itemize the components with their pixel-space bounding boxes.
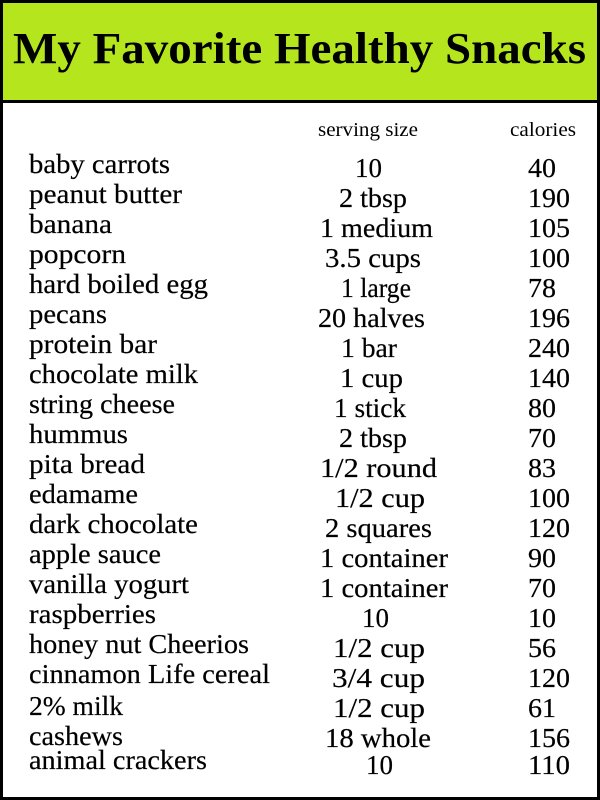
row: cashews: cashews <box>29 721 123 751</box>
row: animal crackers: 110 <box>528 750 570 780</box>
row: animal crackers: 10 <box>366 750 393 780</box>
row: banana: 105 <box>528 213 570 243</box>
row: hummus: hummus <box>29 419 128 449</box>
row: chocolate milk: chocolate milk <box>29 359 199 389</box>
row: peanut butter: 2 tbsp <box>339 183 407 213</box>
row: hard boiled egg: 78 <box>528 273 556 303</box>
row: apple sauce <box>29 539 556 573</box>
row: string cheese: string cheese <box>29 389 175 419</box>
row: pita bread: 1/2 round <box>320 453 438 483</box>
row: popcorn: popcorn <box>29 239 127 269</box>
row: honey nut Cheerios <box>29 629 556 663</box>
row: vanilla yogurt <box>29 569 556 603</box>
row: pecans: 20 halves <box>318 303 425 333</box>
row: honey nut Cheerios: 1/2 cup <box>333 633 425 663</box>
row: hard boiled egg: 1 large <box>341 273 411 303</box>
row: banana: banana <box>29 209 112 239</box>
row: pecans: 196 <box>528 303 570 333</box>
row: 2% milk: 1/2 cup <box>333 693 425 723</box>
row: peanut butter: peanut butter <box>29 179 182 209</box>
column headings: calories <box>510 119 576 141</box>
row: raspberries: 10 <box>362 603 389 633</box>
row: edamame: 100 <box>528 483 570 513</box>
row: chocolate milk: 140 <box>528 363 570 393</box>
row: vanilla yogurt: 70 <box>528 573 556 603</box>
row: vanilla yogurt: 1 container <box>320 573 448 603</box>
row: banana: 1 medium <box>320 213 433 243</box>
row: protein bar: 1 bar <box>341 333 397 363</box>
row: cinnamon Life cereal: 120 <box>528 663 570 693</box>
row: popcorn: 3.5 cups <box>325 243 421 273</box>
row: string cheese: 1 stick <box>334 393 406 423</box>
row: raspberries: raspberries <box>29 599 156 629</box>
row: pecans <box>29 299 570 333</box>
snack rows <box>29 149 570 780</box>
row: animal crackers <box>29 745 570 780</box>
column headings: serving size <box>318 119 418 141</box>
column headings <box>318 119 576 141</box>
row: baby carrots: 10 <box>355 153 382 183</box>
row: apple sauce: 1 container <box>320 543 448 573</box>
row: hard boiled egg: hard boiled egg <box>29 269 208 299</box>
row: edamame: edamame <box>29 479 138 509</box>
title: My Favorite Healthy Snacks <box>13 24 586 73</box>
row: popcorn: 100 <box>528 243 570 273</box>
row: edamame <box>29 479 570 513</box>
row: apple sauce: 90 <box>528 543 556 573</box>
row: chocolate milk <box>29 359 570 393</box>
row: cashews: 156 <box>528 723 570 753</box>
panel: title banner <box>3 3 597 100</box>
row: cinnamon Life cereal: cinnamon Life cereal <box>29 659 270 689</box>
row: apple sauce: apple sauce <box>29 539 161 569</box>
row: string cheese: 80 <box>528 393 556 423</box>
row: 2% milk: 2% milk <box>29 691 124 721</box>
row: animal crackers: animal crackers <box>29 745 207 775</box>
row: cinnamon Life cereal <box>29 659 570 693</box>
row: raspberries: 10 <box>528 603 556 633</box>
row: raspberries <box>29 599 556 633</box>
row: honey nut Cheerios: honey nut Cheerios <box>29 629 249 659</box>
row: peanut butter: 190 <box>528 183 570 213</box>
row: hummus: 2 tbsp <box>339 423 407 453</box>
row: dark chocolate <box>29 509 570 543</box>
row: 2% milk <box>29 691 556 723</box>
row: protein bar: 240 <box>528 333 570 363</box>
row: protein bar: protein bar <box>29 329 157 359</box>
row: hummus <box>29 419 556 453</box>
row: pecans: pecans <box>29 299 107 329</box>
row: dark chocolate: 2 squares <box>325 513 432 543</box>
row: cashews: 18 whole <box>325 723 431 753</box>
row: string cheese <box>29 389 556 423</box>
row: chocolate milk: 1 cup <box>340 363 403 393</box>
row: pita bread <box>29 449 556 483</box>
row: popcorn <box>29 239 570 273</box>
row: hard boiled egg <box>29 269 556 303</box>
row: protein bar <box>29 329 570 363</box>
row: peanut butter <box>29 179 570 213</box>
row: hummus: 70 <box>528 423 556 453</box>
row: baby carrots <box>29 149 556 183</box>
row: banana <box>29 209 570 243</box>
row: dark chocolate: 120 <box>528 513 570 543</box>
row: dark chocolate: dark chocolate <box>29 509 198 539</box>
row: pita bread: 83 <box>528 453 556 483</box>
row: baby carrots: 40 <box>528 153 556 183</box>
row: pita bread: pita bread <box>29 449 146 479</box>
row: 2% milk: 61 <box>528 693 556 723</box>
row: cinnamon Life cereal: 3/4 cup <box>332 663 425 693</box>
row: baby carrots: baby carrots <box>29 149 170 179</box>
row: vanilla yogurt: vanilla yogurt <box>29 569 190 599</box>
row: edamame: 1/2 cup <box>335 483 425 513</box>
row: honey nut Cheerios: 56 <box>528 633 556 663</box>
row: cashews <box>29 721 570 753</box>
